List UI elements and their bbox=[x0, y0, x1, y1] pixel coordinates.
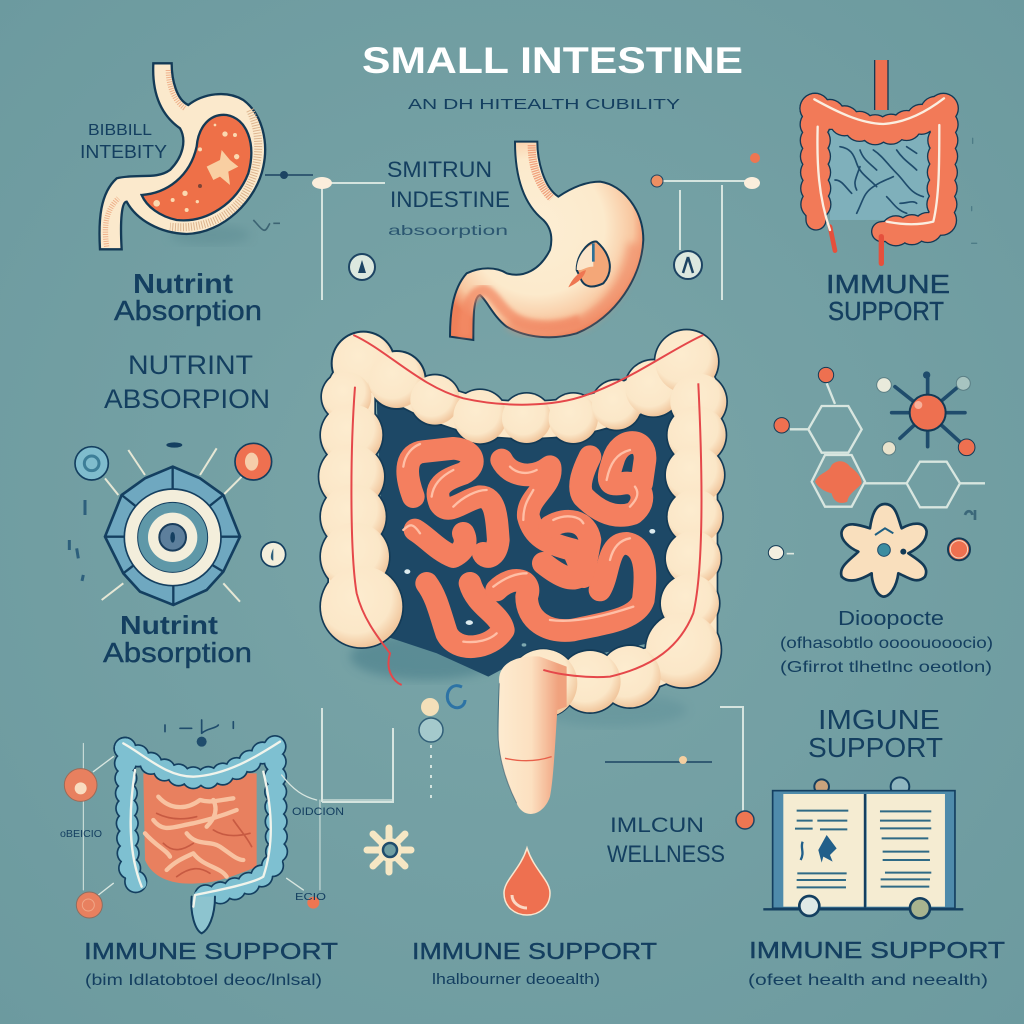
label: immune support top right bbox=[826, 269, 950, 326]
title bbox=[362, 40, 743, 113]
label: immune wellness bbox=[607, 814, 725, 868]
red vessels bbox=[351, 335, 703, 685]
label: nutrient absorption 2 bbox=[104, 350, 270, 414]
label: immune support bottom left: IMMUNE SUPPORT bbox=[84, 938, 338, 964]
icon: bottom-left colon bbox=[64, 720, 393, 933]
rectum bbox=[498, 656, 567, 814]
icon: sun cell bbox=[367, 828, 411, 872]
small callout labels: ECIO bbox=[295, 892, 326, 903]
label: immune support top right: SUPPORT bbox=[828, 296, 944, 326]
label: small intestine top-left bbox=[80, 122, 167, 162]
cream star cell bbox=[841, 504, 927, 597]
icon: small spheres below colon bbox=[419, 686, 465, 742]
icon: central stomach bbox=[450, 142, 643, 340]
small callout labels: oBEICIO bbox=[60, 829, 102, 840]
small callout labels bbox=[60, 806, 344, 903]
colon band fill bbox=[352, 360, 697, 683]
label: nutrient absorption 3: Absorption bbox=[103, 637, 252, 668]
label: small intestine top-left: BIBBILL bbox=[88, 122, 152, 139]
label: central stomach text: absoorption bbox=[388, 222, 508, 238]
label: immune support bottom center: lhalbourner deoealth) bbox=[432, 971, 600, 988]
label: nutrient absorption 3 bbox=[103, 610, 252, 668]
label: central stomach text: INDESTINE bbox=[390, 187, 510, 212]
label: immune support middle right bbox=[808, 704, 943, 763]
label: immune support bottom center bbox=[412, 938, 657, 988]
small callout labels: OIDCION bbox=[292, 806, 344, 818]
label: immune support bottom left bbox=[84, 938, 338, 989]
colon haustra bbox=[319, 330, 726, 717]
label: nutrient absorption 1 bbox=[114, 268, 262, 326]
icon: top-left stomach bbox=[99, 63, 280, 249]
label: immune support bottom right: IMMUNE SUPPORT bbox=[749, 937, 1005, 963]
label: immune support top right: IMMUNE bbox=[826, 269, 950, 299]
label: immune support bottom center: IMMUNE SUPPORT bbox=[412, 938, 657, 964]
label: nutrient absorption 2: ABSORPION bbox=[104, 384, 270, 414]
connector lines bbox=[265, 153, 760, 829]
label: central stomach text bbox=[387, 157, 510, 238]
label: nutrient absorption 1: Absorption bbox=[114, 295, 262, 326]
lumen specks bbox=[404, 529, 655, 647]
icon: molecule cluster bbox=[768, 367, 985, 597]
title: AN DH HITEALTH CUBILITY bbox=[408, 96, 680, 113]
icon: droplet bbox=[504, 848, 550, 915]
label: nutrient absorption 1: Nutrint bbox=[133, 268, 233, 299]
label: central stomach text: SMITRUN bbox=[387, 157, 492, 182]
label: immune support middle right: IMGUNE bbox=[818, 704, 940, 735]
dark abdominal cavity bbox=[377, 400, 680, 677]
label: diopocte bbox=[780, 608, 993, 676]
small intestine highlights bbox=[403, 444, 637, 642]
label: immune support middle right: SUPPORT bbox=[808, 732, 943, 763]
label: immune wellness: IMLCUN bbox=[610, 814, 704, 837]
label: diopocte: (Gfirrot tlhetlnc oeotlon) bbox=[780, 659, 992, 676]
label: diopocte: Dioopocte bbox=[838, 608, 944, 630]
label: immune support bottom right: (ofeet health and neealth) bbox=[748, 972, 988, 989]
icon: top-right colon bbox=[814, 60, 977, 263]
label: immune support bottom left: (bim Idlatobtoel deoc/lnlsal) bbox=[85, 972, 322, 989]
label: nutrient absorption 2: NUTRINT bbox=[128, 350, 253, 380]
main diagram: large and small intestine bbox=[318, 329, 728, 814]
label: diopocte: (ofhasobtlo oooouooocio) bbox=[780, 635, 993, 652]
icon: small badges beside stomach bbox=[349, 251, 702, 280]
icon: open book bbox=[763, 777, 963, 918]
label: small intestine top-left: INTEBITY bbox=[80, 142, 167, 162]
label: immune support bottom right bbox=[748, 937, 1005, 989]
icon: concentric target bbox=[69, 442, 286, 605]
label: immune wellness: WELLNESS bbox=[607, 841, 725, 868]
colon outline bbox=[352, 360, 697, 683]
title: SMALL INTESTINE bbox=[362, 40, 743, 81]
small intestine loops bbox=[408, 442, 645, 647]
label: nutrient absorption 3: Nutrint bbox=[120, 610, 218, 640]
